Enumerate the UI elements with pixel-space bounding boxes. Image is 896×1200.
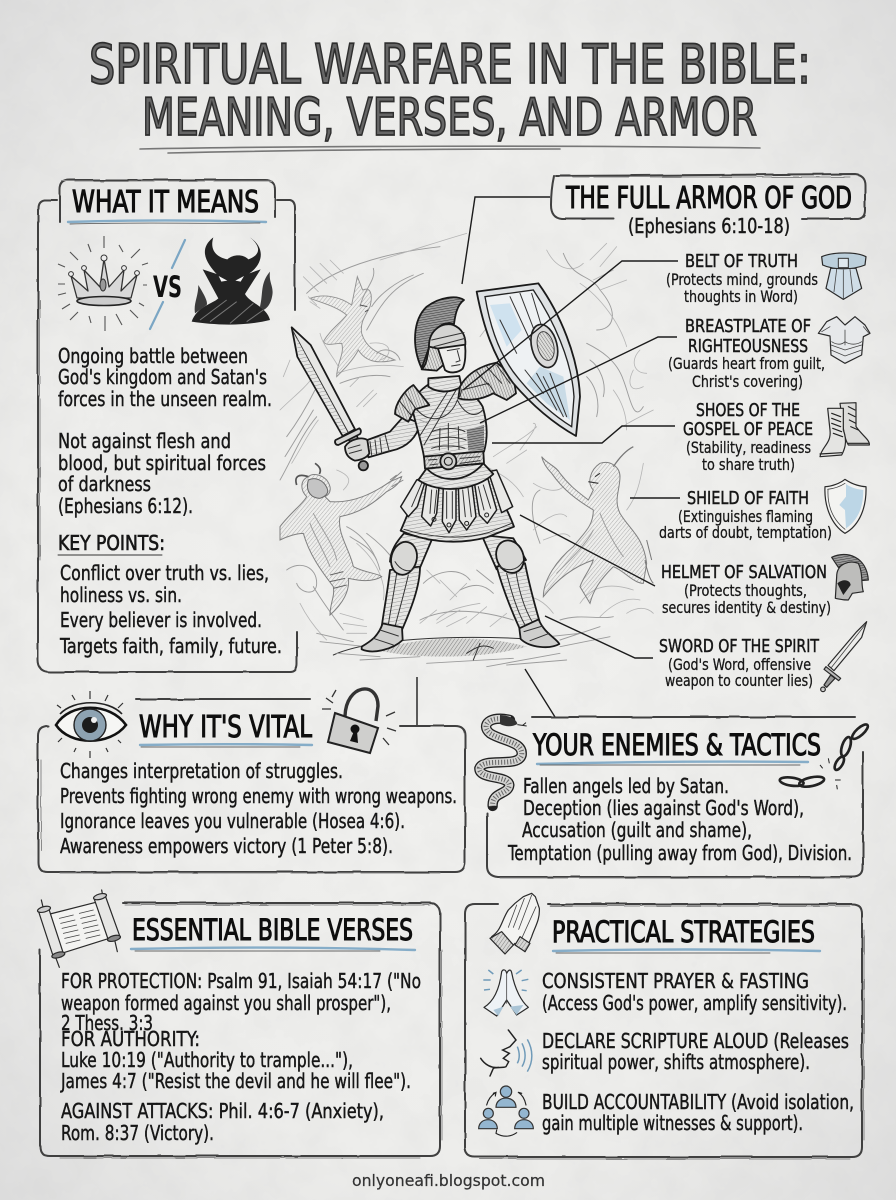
armor: belt of truth: thoughts in Word) bbox=[684, 287, 798, 306]
ground shading bbox=[317, 607, 610, 667]
panel: why it's vital bbox=[38, 689, 465, 873]
icon: helmet bbox=[832, 554, 868, 600]
armor: belt of truth: (Protects mind, grounds bbox=[666, 270, 818, 289]
text block: meaning: Not against flesh and bbox=[58, 429, 231, 453]
armor: breastplate of righteousness bbox=[668, 316, 825, 391]
text block: protection: 2 Thess. 3:3 bbox=[61, 1011, 153, 1035]
armor: sword of the spirit: (God's Word, offensive bbox=[668, 655, 811, 674]
icon: demon silhouette bbox=[192, 237, 273, 325]
breastplate torso bbox=[412, 382, 487, 457]
icon: breastplate bbox=[818, 317, 870, 363]
text block: vital: Prevents fighting wrong enemy with wrong weapons. bbox=[60, 784, 457, 808]
armor: shoes of the gospel of peace bbox=[683, 400, 813, 474]
central illustration: armored soldier with demons bbox=[280, 233, 653, 667]
strategy: declare scripture bbox=[481, 1029, 849, 1076]
subheading: key points: KEY POINTS: bbox=[58, 531, 165, 555]
heading: WHY IT'S VITAL bbox=[139, 710, 312, 745]
icon: shield bbox=[825, 479, 866, 533]
strategy: prayer and fasting bbox=[483, 969, 847, 1016]
heading: PRACTICAL STRATEGIES bbox=[552, 915, 815, 949]
subheading: (Ephesians 6:10-18) bbox=[628, 214, 790, 238]
armor: breastplate of righteousness: RIGHTEOUSNESS bbox=[688, 336, 808, 357]
left leg bbox=[362, 533, 432, 651]
soldier figure bbox=[292, 297, 559, 651]
left pauldron bbox=[395, 385, 429, 422]
text block: meaning: God's kingdom and Satan's bbox=[58, 365, 267, 389]
text block: key points: holiness vs. sin. bbox=[60, 583, 182, 607]
text block: key points: Every believer is involved. bbox=[60, 608, 262, 632]
sword bbox=[292, 327, 368, 470]
footer url: onlyoneafi.blogspot.com bbox=[352, 1171, 545, 1190]
text block: protection: FOR PROTECTION: Psalm 91, Isaiah 54:17 ("No bbox=[61, 969, 421, 993]
text block: key points: Conflict over truth vs. lies, bbox=[60, 561, 269, 585]
text block: authority: James 4:7 ("Resist the devil and he will flee"). bbox=[60, 1069, 411, 1093]
panel: essential bible verses bbox=[37, 890, 442, 1158]
heading: WHAT IT MEANS bbox=[72, 185, 259, 220]
text block: attacks: AGAINST ATTACKS: Phil. 4:6-7 (Anxiety), bbox=[61, 1099, 384, 1123]
text block: vital: Awareness empowers victory (1 Peter 5:8). bbox=[60, 834, 393, 858]
armor: breastplate of righteousness: Christ's covering) bbox=[692, 372, 803, 391]
panel: what it means bbox=[38, 180, 297, 672]
panel: practical strategies bbox=[465, 893, 864, 1159]
skirt bbox=[401, 463, 514, 542]
armor: helmet of salvation: (Protects thoughts, bbox=[684, 581, 807, 600]
head bbox=[415, 297, 465, 372]
text block: meaning bbox=[58, 344, 272, 518]
armor: belt of truth bbox=[666, 251, 818, 306]
armor: shield of faith: darts of doubt, temptation) bbox=[659, 523, 832, 542]
text block: attacks: Rom. 8:37 (Victory). bbox=[61, 1121, 214, 1145]
neck bbox=[428, 376, 462, 391]
text block: vital: Changes interpretation of struggles. bbox=[60, 759, 343, 783]
armor: sword of the spirit bbox=[659, 636, 819, 690]
armor: shield of faith bbox=[659, 488, 832, 542]
chest strap bbox=[419, 382, 460, 445]
icon: eye bbox=[56, 691, 126, 758]
icon: open padlock bbox=[322, 689, 396, 753]
armor: shoes of the gospel of peace: to share truth) bbox=[702, 455, 795, 474]
text block: enemies bbox=[507, 774, 852, 865]
strategy: accountability: gain multiple witnesses & support). bbox=[542, 1111, 803, 1135]
text block: vital: Ignorance leaves you vulnerable (Hosea 4:6). bbox=[60, 809, 405, 833]
text block: meaning: of darkness bbox=[58, 472, 151, 496]
armor: shield of faith: (Extinguishes flaming bbox=[678, 507, 813, 526]
text block: meaning: forces in the unseen realm. bbox=[58, 387, 272, 411]
text block: authority: Luke 10:19 ("Authority to trample..."), bbox=[61, 1048, 353, 1072]
armor: shoes of the gospel of peace: SHOES OF THE bbox=[696, 400, 800, 421]
title: MEANING, VERSES, AND ARMOR bbox=[142, 88, 757, 148]
heading: ESSENTIAL BIBLE VERSES bbox=[132, 913, 413, 947]
title bbox=[89, 33, 811, 148]
armor: shoes of the gospel of peace: (Stability, readiness bbox=[686, 438, 811, 457]
icon: boots bbox=[820, 403, 869, 457]
text block: key points bbox=[59, 561, 282, 658]
panel: your enemies and tactics bbox=[479, 715, 870, 878]
armor: sword of the spirit: SWORD OF THE SPIRIT bbox=[659, 636, 819, 657]
left arm and hand bbox=[367, 417, 420, 457]
text block: meaning: blood, but spiritual forces bbox=[58, 451, 266, 475]
armor: helmet of salvation: secures identity & destiny) bbox=[662, 598, 831, 617]
right leg bbox=[482, 535, 559, 647]
strategy: accountability: BUILD ACCOUNTABILITY (Avoid isolation, bbox=[542, 1090, 854, 1114]
demon left bbox=[280, 463, 403, 615]
panel: full armor of god bbox=[551, 174, 870, 692]
icon: broken chain bbox=[779, 722, 870, 789]
text block: meaning: (Ephesians 6:12). bbox=[58, 494, 193, 518]
text block: vital bbox=[60, 759, 457, 858]
icon: crown bbox=[58, 236, 148, 331]
text block: attacks bbox=[61, 1099, 384, 1145]
icon: sword bbox=[821, 622, 867, 692]
armor: shield of faith: SHIELD OF FAITH bbox=[687, 488, 809, 509]
strategy: declare scripture: spiritual power, shifts atmosphere). bbox=[542, 1050, 810, 1074]
icon: snake bbox=[479, 715, 527, 806]
armor: helmet of salvation: HELMET OF SALVATION bbox=[661, 562, 827, 583]
heading: YOUR ENEMIES & TACTICS bbox=[532, 728, 821, 762]
text block: enemies: Fallen angels led by Satan. bbox=[523, 774, 729, 798]
pteruges tabs bbox=[401, 470, 513, 533]
armor: helmet of salvation bbox=[661, 562, 831, 617]
demon right bbox=[542, 447, 653, 603]
armor: belt of truth: BELT OF TRUTH bbox=[685, 251, 798, 272]
text block: protection: weapon formed against you shall prosper"), bbox=[61, 991, 391, 1015]
callout lines bbox=[417, 197, 680, 725]
ghost demon top left bbox=[308, 268, 395, 377]
text block: authority: FOR AUTHORITY: bbox=[61, 1027, 200, 1051]
strategy: prayer and fasting: CONSISTENT PRAYER & FASTING bbox=[542, 969, 809, 993]
text block: enemies: Deception (lies against God's Word), bbox=[523, 796, 804, 820]
text block: key points: Targets faith, family, future. bbox=[59, 634, 282, 658]
text block: authority bbox=[60, 1027, 411, 1093]
text block: meaning: Ongoing battle between bbox=[58, 344, 248, 368]
armor: shoes of the gospel of peace: GOSPEL OF PEACE bbox=[683, 419, 813, 440]
armor: sword of the spirit: weapon to counter lies) bbox=[665, 671, 813, 690]
shield bbox=[477, 283, 580, 436]
armor: breastplate of righteousness: BREASTPLATE OF bbox=[685, 316, 811, 337]
icon: belt bbox=[822, 253, 866, 299]
text block: protection bbox=[61, 969, 421, 1035]
belt bbox=[424, 451, 484, 469]
icon: praying hands bbox=[490, 893, 539, 954]
text block: enemies: Accusation (guilt and shame), bbox=[522, 818, 752, 842]
icon: scroll bbox=[37, 890, 121, 967]
spiritual swirl background strokes bbox=[280, 233, 653, 640]
strategy: accountability bbox=[479, 1086, 854, 1136]
strategy: declare scripture: DECLARE SCRIPTURE ALOUD (Releases bbox=[542, 1029, 849, 1053]
armor: breastplate of righteousness: (Guards heart from guilt, bbox=[668, 354, 825, 373]
right arm bbox=[458, 363, 516, 400]
skirt top flaps bbox=[418, 463, 493, 489]
vs label: VS bbox=[153, 270, 182, 304]
